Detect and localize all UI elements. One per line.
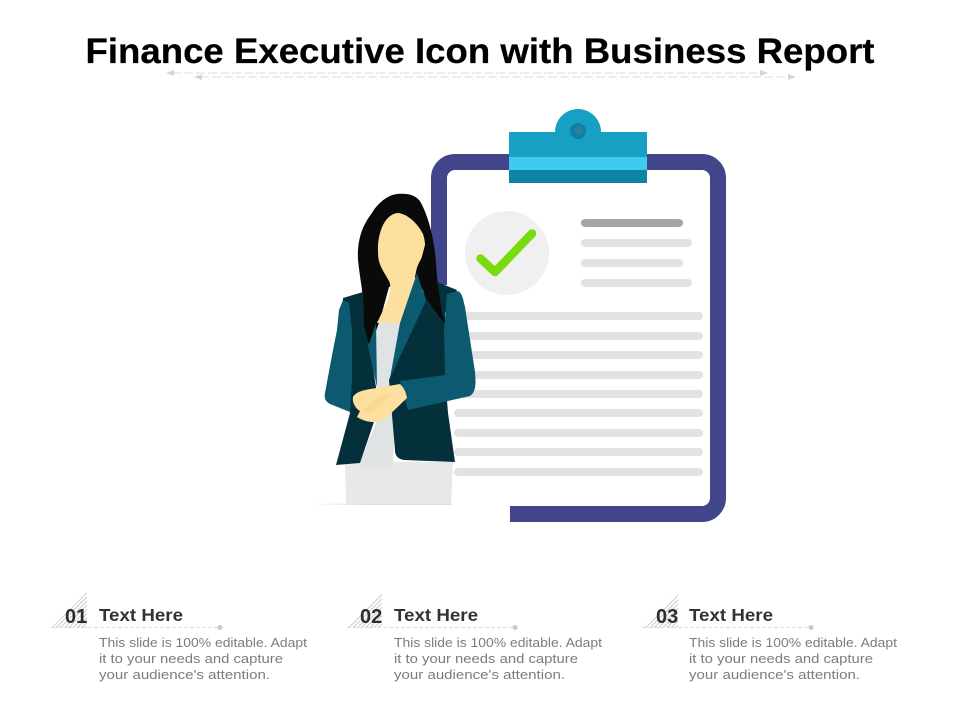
jacket dark panels xyxy=(336,282,457,465)
item 03 xyxy=(642,592,898,682)
body text: your audience's attention. xyxy=(394,668,565,682)
item 01 xyxy=(51,592,308,682)
shirt xyxy=(358,320,402,467)
body text: your audience's attention. xyxy=(99,668,270,682)
heading: Text Here xyxy=(99,605,183,625)
title underline arrows xyxy=(166,70,796,80)
clipboard illustration xyxy=(439,109,718,514)
hands xyxy=(353,384,407,422)
number: 03 xyxy=(656,606,678,628)
heading: Text Here xyxy=(689,605,773,625)
hatch decoration xyxy=(51,592,87,628)
body text: This slide is 100% editable. Adapt xyxy=(394,636,603,650)
short report lines xyxy=(581,219,692,287)
body text xyxy=(394,636,603,682)
skirt xyxy=(345,462,453,504)
number: 01 xyxy=(65,606,87,628)
body text: This slide is 100% editable. Adapt xyxy=(689,636,898,650)
hatch decoration xyxy=(346,592,382,628)
body text: it to your needs and capture xyxy=(99,652,283,666)
title: Finance Executive Icon with Business Report xyxy=(86,32,875,71)
ground shadow xyxy=(310,504,452,505)
body text: it to your needs and capture xyxy=(394,652,578,666)
body text xyxy=(689,636,898,682)
check badge xyxy=(465,211,549,295)
businesswoman figure xyxy=(310,194,475,505)
body text: This slide is 100% editable. Adapt xyxy=(99,636,308,650)
hatch decoration xyxy=(642,592,678,628)
long report lines xyxy=(454,312,703,476)
jacket sleeves xyxy=(325,291,475,412)
body text: it to your needs and capture xyxy=(689,652,873,666)
body text xyxy=(99,636,308,682)
body text: your audience's attention. xyxy=(689,668,860,682)
number: 02 xyxy=(360,606,382,628)
clip xyxy=(509,109,647,183)
clipboard board xyxy=(439,162,718,514)
heading: Text Here xyxy=(394,605,478,625)
jacket lapels xyxy=(368,273,426,387)
face and neck xyxy=(377,213,425,323)
hair back xyxy=(358,194,447,347)
item 02 xyxy=(346,592,603,682)
hair over jacket xyxy=(417,245,447,327)
